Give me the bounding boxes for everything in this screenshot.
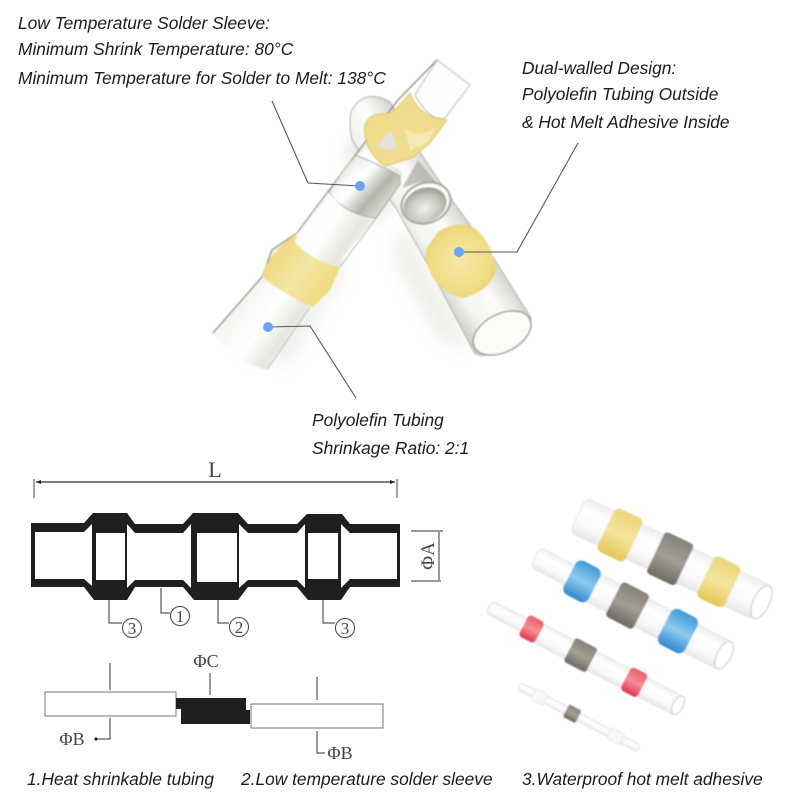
text: low temperature solder sleeve specs: Minimum Shrink Temperature: 80°C (18, 39, 294, 59)
leader line: polyolefin tubing (263, 322, 356, 398)
photo: crossed solder sleeves (213, 60, 538, 370)
soft shadow under tubes (235, 110, 470, 365)
callout 1 (161, 588, 190, 626)
text: low temperature solder sleeve specs: Low Temperature Solder Sleeve: (18, 13, 270, 33)
callout 3 left: 3 (128, 619, 136, 638)
sleeve interior openings (35, 524, 397, 588)
right tube upper opening (396, 176, 456, 230)
left tube body (213, 100, 402, 370)
dimension L: L (208, 457, 222, 482)
photo: four sleeve sizes (483, 493, 779, 755)
text: polyolefin tubing: Polyolefin Tubing (312, 410, 444, 430)
dimension phi A (411, 531, 443, 581)
solder sleeve block (176, 698, 250, 724)
callout 1: 1 (176, 607, 184, 626)
red sleeve (483, 595, 689, 720)
dimension L (34, 457, 397, 498)
gray solder section (329, 155, 400, 218)
yellow sleeve (568, 493, 779, 627)
dimension phi B left: ΦB (59, 729, 85, 749)
callout 3 right (323, 600, 354, 638)
text: polyolefin tubing: Shrinkage Ratio: 2:1 (312, 438, 469, 458)
dimension phi A: ΦA (418, 542, 439, 570)
dimension phi B right: ΦB (327, 743, 353, 763)
dot: polyolefin tubing (263, 322, 273, 332)
callout 2: 2 (235, 618, 243, 637)
captions row: 2.Low temperature solder sleeve (240, 769, 493, 789)
text: low temperature solder sleeve specs (18, 13, 386, 88)
callout 2 (218, 600, 248, 637)
callout 3 left (109, 600, 142, 638)
blue sleeve (526, 539, 740, 676)
leader line: dual-walled (454, 143, 578, 257)
diagram: component dimensions (45, 651, 383, 763)
tubing right (251, 704, 383, 728)
dot: dual-walled (454, 247, 464, 257)
callout 3 right: 3 (341, 619, 349, 638)
captions row: 1.Heat shrinkable tubing (27, 769, 214, 789)
top yellow end of left tube (365, 60, 470, 166)
dot: solder sleeve (355, 181, 365, 191)
right tube open end (466, 302, 538, 364)
dimension phi C (193, 651, 219, 695)
dimension phi B left (59, 663, 110, 749)
dimension phi C: ΦC (193, 651, 219, 671)
yellow band on left tube (262, 233, 340, 307)
dimension phi B right (317, 677, 353, 763)
text: dual-walled design (522, 58, 730, 132)
leader line: solder sleeve (272, 101, 365, 191)
text: polyolefin tubing (312, 410, 469, 458)
tubing left (45, 692, 176, 716)
text: dual-walled design: Polyolefin Tubing Outside (522, 84, 718, 104)
yellow band on right tube (426, 225, 496, 298)
text: low temperature solder sleeve specs: Minimum Temperature for Solder to Melt: 138°C (18, 68, 386, 88)
lens highlight left tube (300, 170, 360, 240)
right tube body (350, 97, 538, 364)
text: dual-walled design: & Hot Melt Adhesive Inside (522, 112, 730, 132)
captions row: 3.Waterproof hot melt adhesive (522, 769, 763, 789)
small clear sleeve (516, 680, 642, 755)
captions row (27, 769, 763, 789)
gray shading above ring (402, 160, 448, 197)
sleeve outline (31, 513, 400, 600)
diagram: sleeve cross-section (31, 457, 443, 638)
text: dual-walled design: Dual-walled Design: (522, 58, 676, 78)
